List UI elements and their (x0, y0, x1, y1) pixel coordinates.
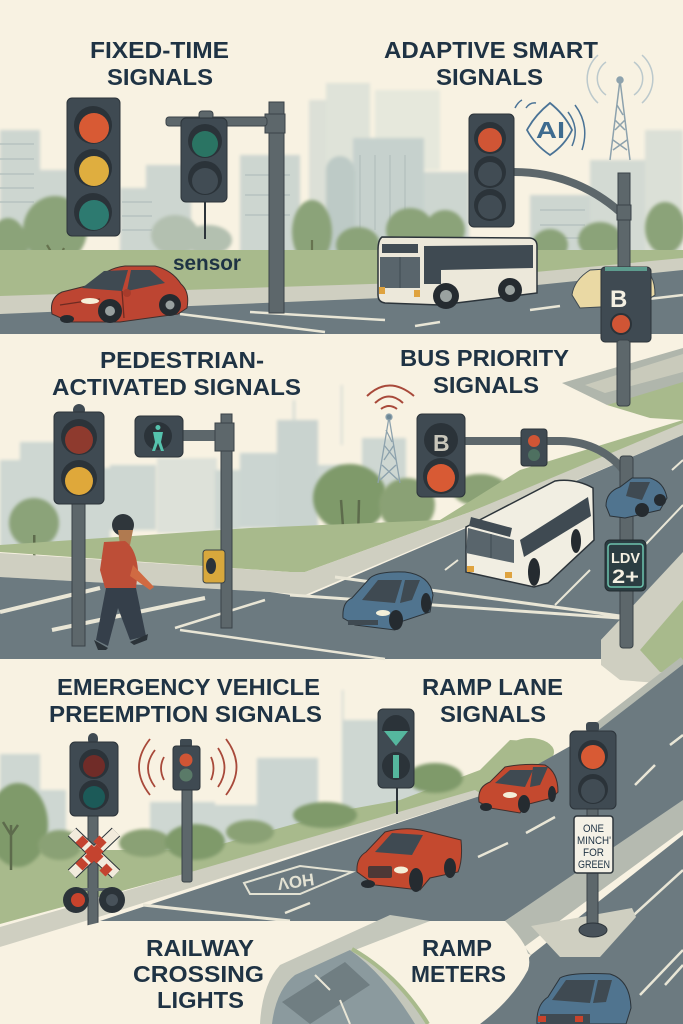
ramp meter signal with sign (570, 722, 616, 937)
road left arm and diagonal (0, 435, 683, 659)
left crossing signal (70, 733, 118, 983)
title: railway crossing lights (133, 935, 264, 1013)
title: emergency vehicle preemption signals: PREEMPTION SIGNALS (49, 701, 322, 727)
emergency waves (139, 739, 236, 795)
panel: middle row scene (0, 340, 683, 685)
title: ramp meters (411, 935, 506, 987)
overpass ramp (260, 915, 430, 1024)
upper pole continuation (617, 340, 630, 406)
title: emergency vehicle preemption signals: EMERGENCY VEHICLE (57, 674, 320, 700)
overhead signal with sensor (181, 118, 227, 239)
blue car middle (343, 572, 433, 630)
AI badge (515, 100, 585, 155)
adaptive signal (469, 114, 514, 227)
ramp meter base plate (531, 908, 636, 957)
title: ramp meters: RAMP (422, 935, 492, 961)
emergency signal (173, 739, 200, 882)
title: ramp lane signals (422, 674, 563, 727)
label: sensor: sensor (173, 252, 241, 275)
panel: bottom row scene (0, 660, 683, 1024)
sign: one minch for green: GREEN (578, 859, 610, 871)
sign: one minch for green: FOR (583, 847, 604, 859)
right corner pavement (601, 552, 683, 685)
trees bottom (0, 738, 554, 870)
pedestrian (94, 514, 154, 650)
title: fixed-time signals: SIGNALS (107, 64, 213, 90)
radio tower (587, 55, 653, 160)
upper right grass (607, 382, 683, 420)
bus arm and pole (465, 441, 633, 648)
title: bus priority signals: SIGNALS (433, 372, 539, 398)
title: bus priority signals: BUS PRIORITY (400, 345, 569, 371)
title: adaptive smart signals: ADAPTIVE SMART (384, 37, 598, 63)
ramp upper edge (590, 660, 683, 732)
sign: one minch for green (574, 816, 613, 873)
HOV road marking: HOV (276, 869, 315, 893)
crosswalk and lane markings (0, 460, 683, 659)
title: ramp lane signals: SIGNALS (440, 701, 546, 727)
red pickup (357, 829, 462, 892)
skyline middle (0, 385, 406, 550)
title: fixed-time signals (90, 37, 229, 90)
grass bottom (0, 740, 557, 924)
white bus (378, 237, 537, 309)
panel: top row scene (0, 37, 683, 342)
white bus middle (466, 480, 594, 587)
crossing lamps (63, 887, 125, 913)
grass middle (0, 420, 683, 572)
title: bus priority signals (400, 345, 569, 398)
left signal (54, 404, 104, 646)
building windows top (0, 144, 585, 238)
title: emergency vehicle preemption signals (49, 674, 322, 727)
bus signal (417, 414, 465, 497)
ramp lane signal (378, 709, 414, 814)
trees top (0, 196, 683, 282)
upper right ramp pavement (562, 348, 683, 405)
sidewalk middle (0, 423, 683, 595)
small blue car (606, 478, 667, 518)
large fixed-time signal (67, 98, 120, 236)
far right strip (505, 800, 683, 955)
title: railway crossing lights: LIGHTS (157, 987, 244, 1013)
cream label area (0, 921, 529, 1024)
pedestrian signal (135, 414, 234, 628)
skyline top (0, 83, 683, 255)
grass top (0, 250, 683, 300)
yellow car behind sign (572, 267, 655, 308)
title: ramp meters: METERS (411, 961, 506, 987)
title: pedestrian-activated signals (52, 347, 301, 400)
title: ramp lane signals: RAMP LANE (422, 674, 563, 700)
sign: one minch for green: ONE (583, 823, 604, 835)
right corner grass (640, 600, 683, 672)
title: adaptive smart signals (384, 37, 598, 90)
sign: one minch for green: MINCH' (577, 835, 611, 847)
blue car bottom (537, 974, 631, 1024)
sidewalk bottom (0, 790, 483, 947)
trees middle (9, 464, 508, 557)
road top (0, 270, 683, 334)
lower right road (480, 835, 683, 1024)
tree trunks top (3, 240, 312, 287)
AI badge: AI (536, 117, 565, 143)
red car (51, 266, 188, 323)
red signal waves (367, 386, 414, 409)
LDV sign: 2+ (612, 567, 639, 588)
title: railway crossing lights: CROSSING (133, 961, 264, 987)
road markings top (180, 295, 683, 332)
title: adaptive smart signals: SIGNALS (436, 64, 543, 90)
title: railway crossing lights: RAILWAY (146, 935, 254, 961)
title: pedestrian-activated signals: ACTIVATED SIGNALS (52, 374, 301, 400)
LDV sign: LDV (611, 550, 640, 567)
lane markings bottom (143, 735, 683, 995)
curved arm and pole (514, 172, 631, 268)
crossing base (44, 982, 130, 1015)
tower middle (378, 414, 400, 483)
small bus-lane signal (521, 429, 547, 466)
bus signal: B (433, 430, 450, 456)
pavement top (0, 258, 683, 316)
push button (203, 550, 225, 583)
bus sign top: B (610, 286, 627, 313)
HOV road marking (244, 866, 352, 894)
skyline bottom (0, 690, 422, 852)
LDV sign (605, 540, 646, 591)
bus sign top (601, 267, 651, 342)
title: pedestrian-activated signals: PEDESTRIAN- (100, 347, 264, 373)
railway crossbuck (72, 832, 116, 874)
ramp road (100, 664, 683, 921)
title: fixed-time signals: FIXED-TIME (90, 37, 229, 63)
red hatchback (479, 764, 558, 813)
upper right road strip (585, 354, 683, 393)
sensor pole and arm (166, 102, 285, 313)
